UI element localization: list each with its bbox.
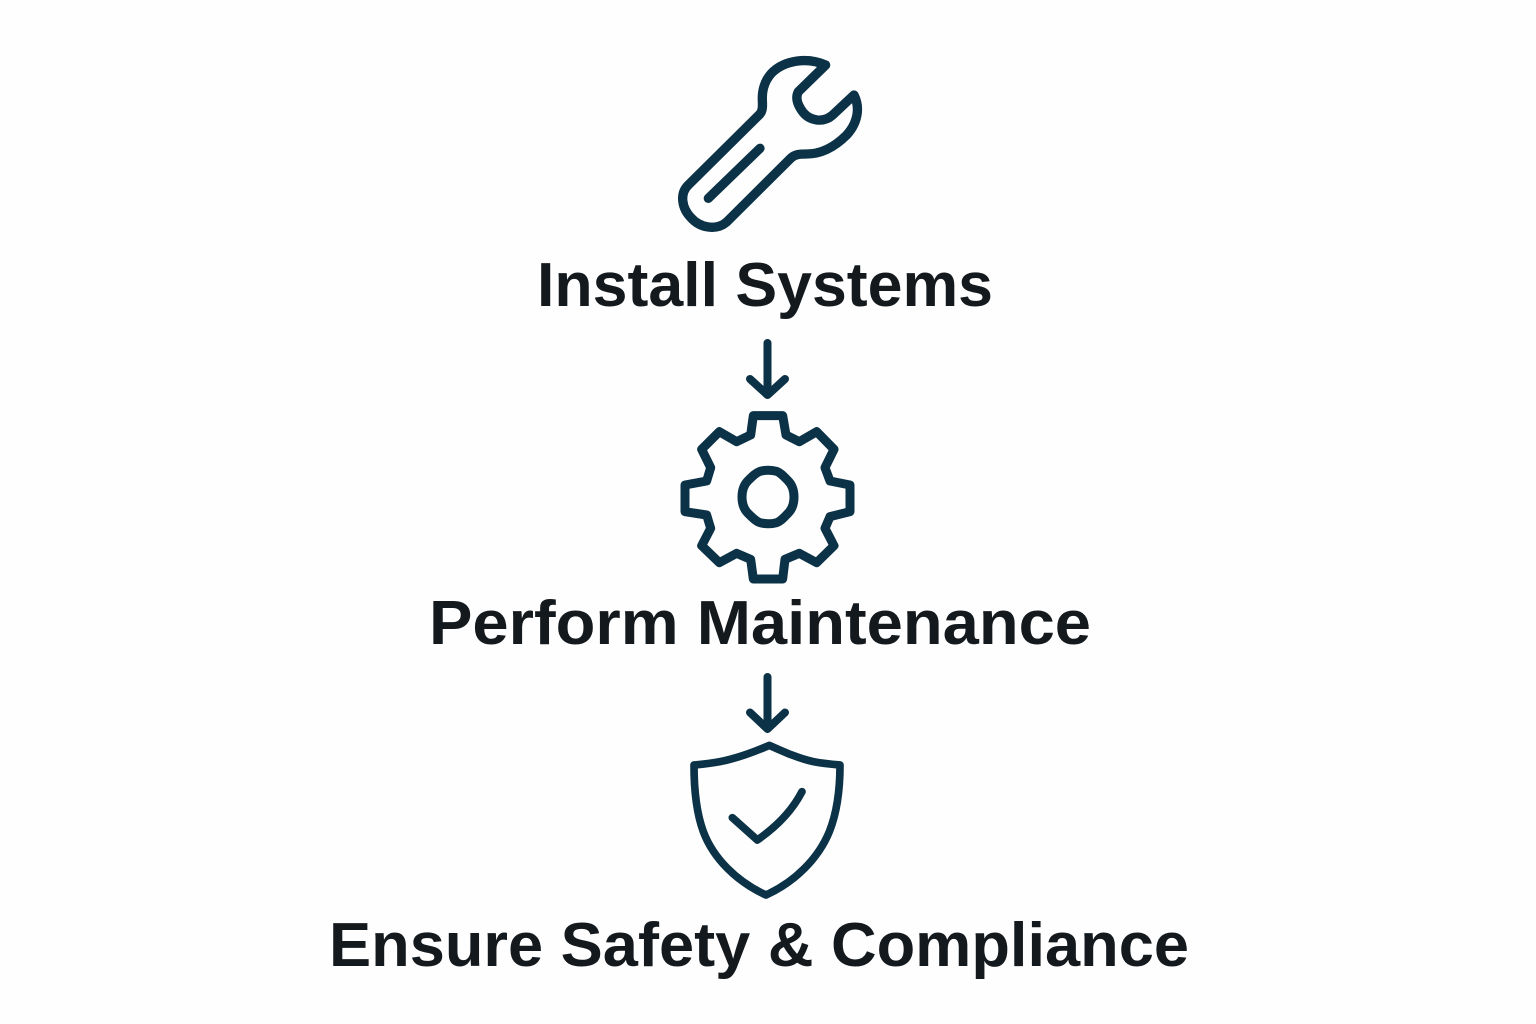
heading: Ensure Safety & Compliance: Ensure Safety & Compliance bbox=[329, 911, 1189, 980]
arrow: install to maintenance bbox=[750, 343, 785, 395]
heading: Install Systems: Install Systems bbox=[537, 251, 993, 320]
icon: gear bbox=[685, 416, 850, 579]
heading: Perform Maintenance: Perform Maintenance bbox=[429, 589, 1091, 658]
icon: shield with check bbox=[694, 745, 840, 895]
icon: wrench bbox=[683, 61, 857, 227]
arrow: maintenance to safety bbox=[750, 677, 785, 729]
